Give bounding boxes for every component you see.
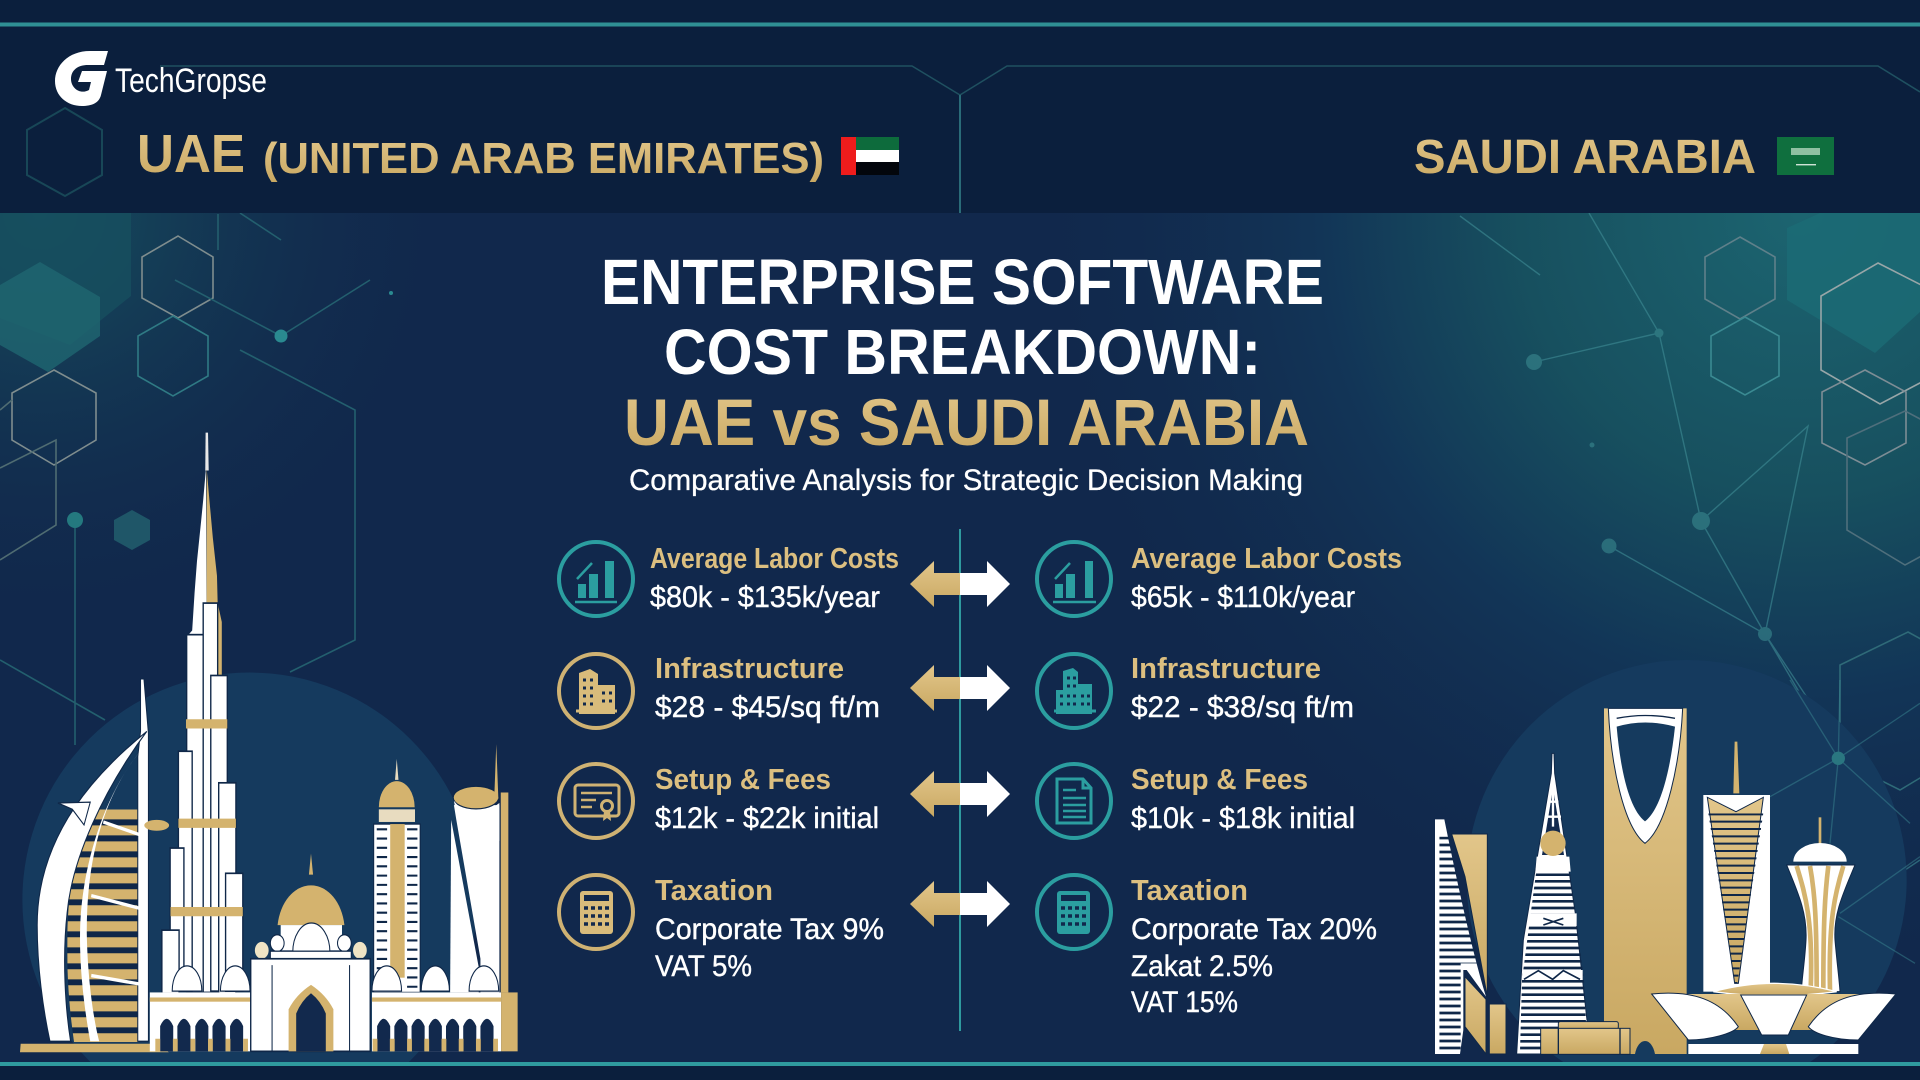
text: Saudi taxation: Corporate Tax 20%	[1131, 913, 1377, 946]
text: Saudi taxation: Zakat 2.5%	[1131, 950, 1273, 983]
Left tower	[1435, 819, 1506, 1054]
Museum	[1652, 983, 1896, 1054]
header: UAE	[137, 124, 824, 184]
Al Faisaliah Tower	[1517, 753, 1591, 1054]
arrow: setup comparison	[910, 771, 1010, 817]
network over glow	[1770, 680, 1920, 963]
text: UAE infrastructure: $28 - $45/sq ft/m	[655, 691, 880, 724]
icon: UAE flag	[841, 137, 899, 175]
header: Saudi Arabia: SAUDI ARABIA	[1414, 131, 1756, 184]
subtitle: Comparative Analysis for Strategic Decision Making	[629, 464, 1303, 497]
arrow: labor comparison	[910, 561, 1010, 607]
text: UAE taxation: Corporate Tax 9%	[655, 913, 884, 946]
title: UAE vs SAUDI ARABIA	[624, 385, 1309, 459]
icon: UAE labor chart	[559, 542, 633, 616]
text: UAE setup: Setup & Fees	[655, 764, 831, 796]
title: ENTERPRISE SOFTWARE	[601, 246, 1324, 318]
row: infrastructure	[559, 653, 1354, 728]
text: UAE taxation: Taxation	[655, 875, 773, 907]
logo: TechGropse: TechGropse	[115, 62, 267, 100]
text: Saudi infrastructure: $22 - $38/sq ft/m	[1131, 691, 1354, 724]
Water tower	[1787, 817, 1855, 992]
text: UAE labor: $80k - $135k/year	[650, 581, 880, 614]
text: Saudi setup: Setup & Fees	[1131, 764, 1308, 796]
icon: UAE building	[559, 654, 633, 728]
text: Saudi taxation: VAT 15%	[1131, 986, 1238, 1019]
Kingdom Centre	[1604, 708, 1687, 1054]
Cylinder tower	[450, 744, 508, 992]
header: UAE: (UNITED ARAB EMIRATES)	[263, 134, 824, 183]
text: Saudi setup	[1131, 764, 1355, 835]
icon: Saudi calculator	[1037, 875, 1111, 949]
text: Saudi labor: $65k - $110k/year	[1131, 581, 1355, 614]
icon: Saudi document	[1037, 764, 1111, 838]
title: COST BREAKDOWN:	[664, 316, 1261, 388]
header bar	[0, 0, 1920, 213]
text: Saudi labor: Average Labor Costs	[1131, 543, 1402, 575]
text: UAE taxation: VAT 5%	[655, 950, 752, 983]
text: Saudi infrastructure	[1131, 653, 1354, 724]
center divider	[959, 529, 961, 1031]
arrow: infrastructure comparison	[910, 665, 1010, 711]
Grand mosque	[150, 854, 518, 1051]
text: UAE taxation	[655, 875, 884, 983]
row: average labor costs	[559, 542, 1402, 616]
text: Saudi infrastructure: Infrastructure	[1131, 653, 1321, 685]
icon: Saudi flag	[1777, 137, 1834, 175]
row: setup and fees	[559, 764, 1355, 838]
icon: UAE calculator	[559, 875, 633, 949]
bottom band	[0, 1062, 1920, 1080]
Burj Al Arab	[20, 679, 169, 1052]
Low gold building	[1541, 1022, 1630, 1054]
header: UAE: UAE	[137, 124, 245, 184]
text: Saudi taxation	[1131, 875, 1377, 1019]
text: Saudi setup: $10k - $18k initial	[1131, 802, 1355, 835]
icon: UAE certificate	[559, 764, 633, 838]
Burj Khalifa	[162, 433, 243, 993]
Triangle tower	[1703, 742, 1770, 992]
text: Saudi taxation: Taxation	[1131, 875, 1248, 907]
arrow: taxation comparison	[910, 881, 1010, 927]
text: UAE infrastructure	[655, 653, 880, 724]
text: Saudi labor	[1131, 543, 1402, 614]
title	[601, 246, 1324, 459]
network pattern right	[1460, 213, 1920, 880]
row: taxation	[559, 875, 1377, 1019]
logo: TechGropse	[55, 51, 267, 106]
icon: Saudi building	[1037, 654, 1111, 728]
hexagon pattern left	[0, 213, 393, 745]
icon: Saudi labor chart	[1037, 542, 1111, 616]
text: UAE setup	[655, 764, 879, 835]
hexagon pattern right	[1705, 213, 1920, 790]
text: UAE setup: $12k - $22k initial	[655, 802, 879, 835]
UAE skyline illustration	[20, 433, 518, 1080]
Dome tower	[374, 759, 420, 992]
text: UAE infrastructure: Infrastructure	[655, 653, 844, 685]
text: UAE labor	[650, 543, 899, 614]
Saudi skyline illustration	[1435, 660, 1920, 1080]
text: UAE labor: Average Labor Costs	[650, 543, 899, 575]
